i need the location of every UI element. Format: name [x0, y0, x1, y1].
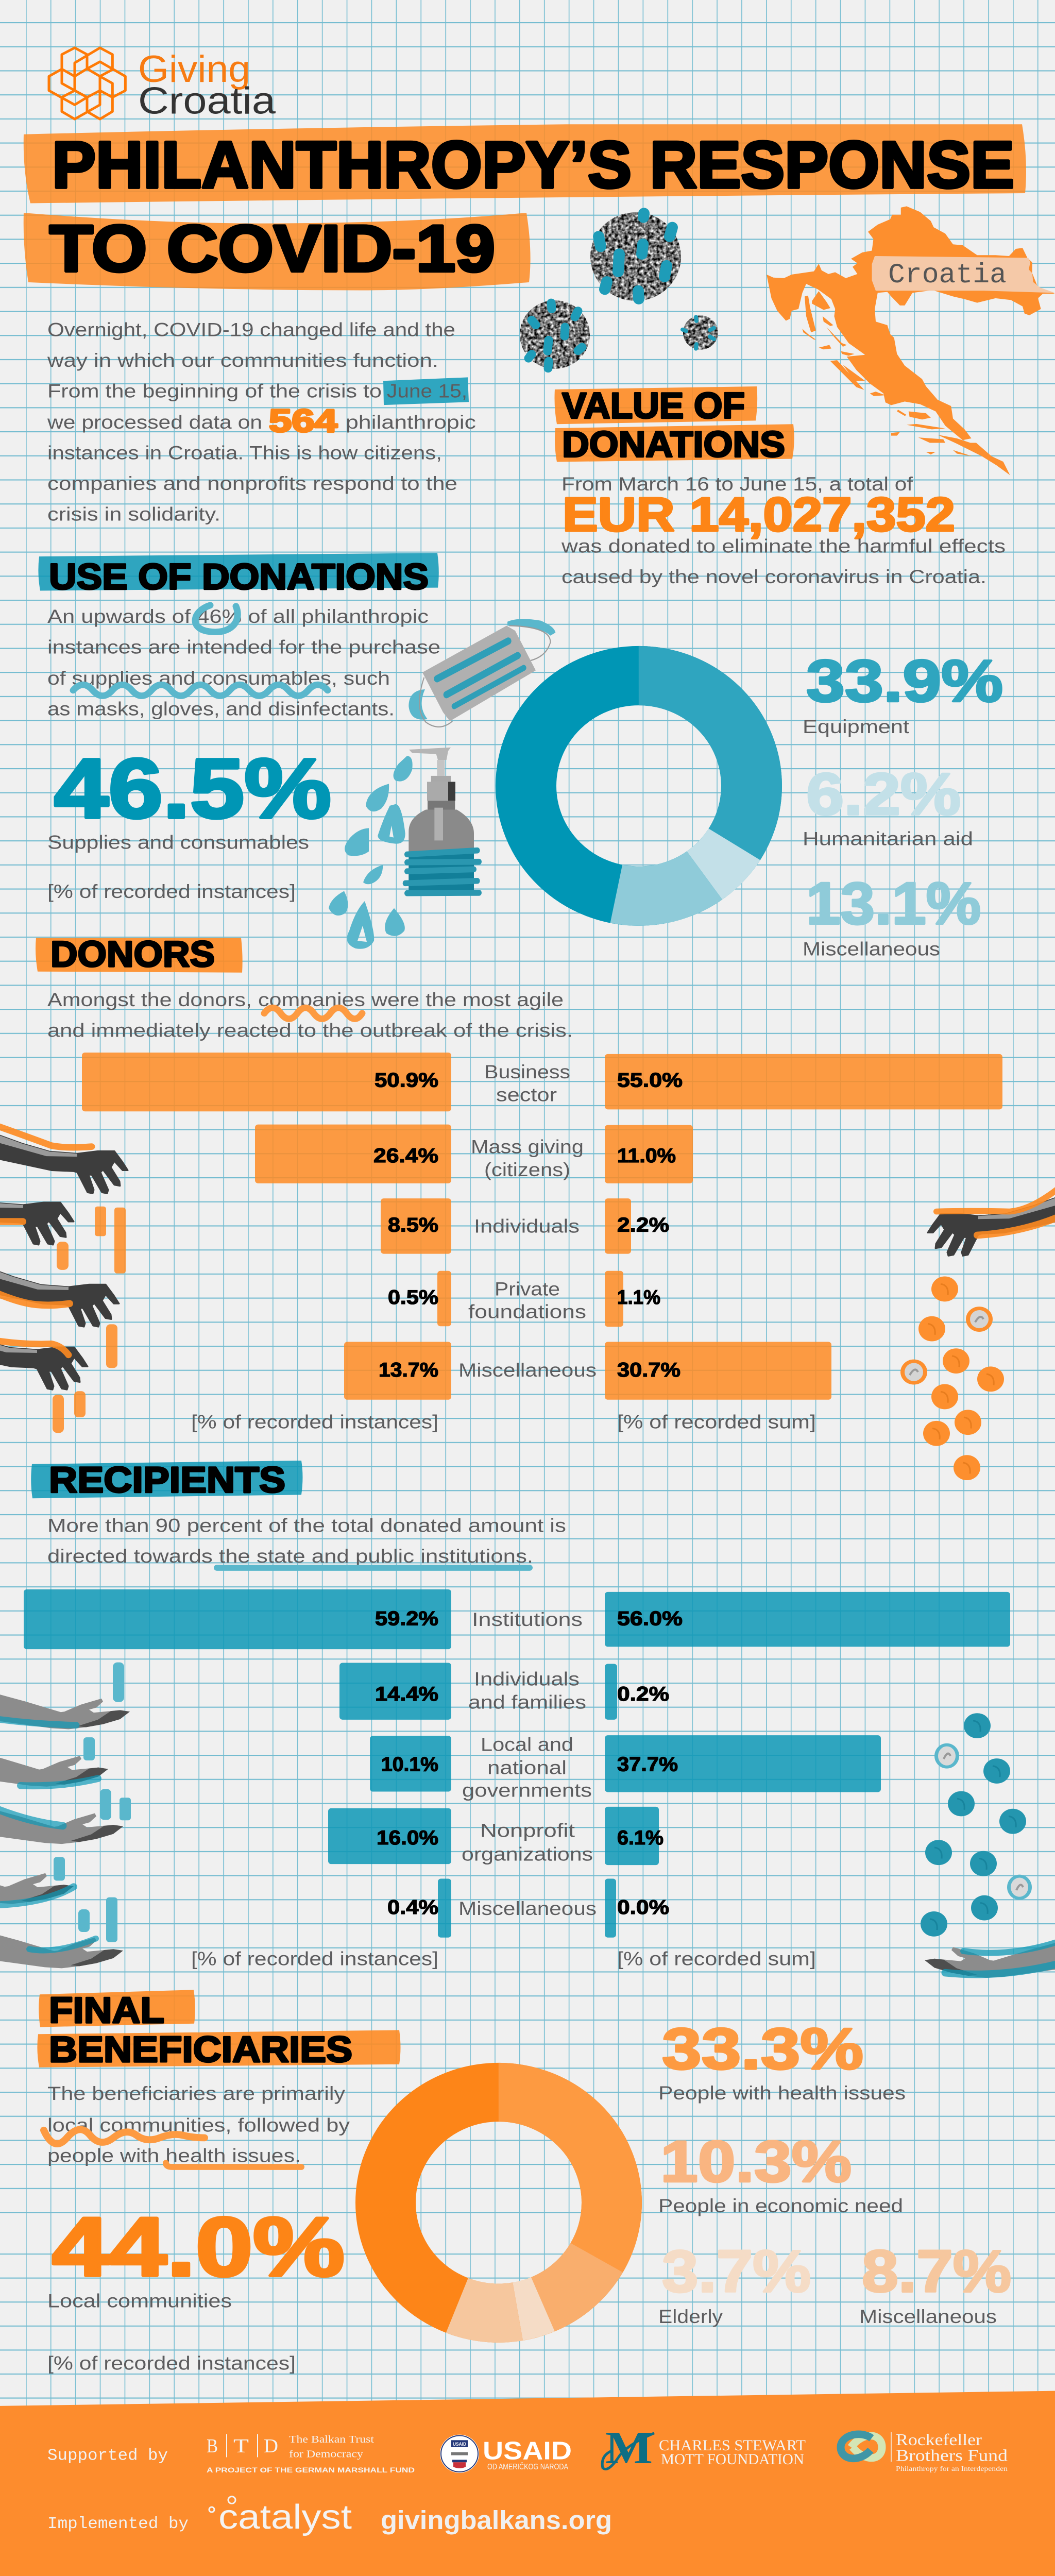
- annotation: teal squiggle: [73, 685, 328, 696]
- stat: people in economic need: [658, 2129, 903, 2216]
- stat: humanitarian aid: 6.2%: [806, 760, 961, 827]
- footer: [0, 2391, 1055, 2576]
- text block: introduction: philanthropic: [346, 411, 476, 433]
- bar values: [375, 1607, 683, 1919]
- stat: elderly: 3.7%: [662, 2238, 811, 2304]
- text block: introduction: 564: [269, 403, 337, 439]
- logo: catalyst: catalyst: [218, 2498, 352, 2536]
- logo: Balkan Trust for Democracy: for Democracy: [289, 2449, 364, 2460]
- title band 2: [24, 213, 531, 290]
- stat: people with health issues: 33.3%: [662, 2016, 863, 2081]
- stat: local communities: 44.0%: [52, 2200, 345, 2294]
- heading: final beneficiaries: BENEFICIARIES: [49, 2030, 352, 2070]
- bar values: 30.7%: [617, 1359, 680, 1381]
- heading: donors: DONORS: [50, 935, 215, 975]
- axis notes: [% of recorded instances]: [191, 1948, 438, 1969]
- stat: equipment: [803, 648, 1003, 737]
- stat: equipment: Equipment: [803, 716, 910, 737]
- bar values: 50.9%: [375, 1069, 438, 1091]
- stat: miscellaneous: [859, 2238, 1011, 2327]
- logo: USAID: [440, 2435, 572, 2473]
- text block: beneficiaries intro: [44, 2083, 350, 2167]
- heading: value of donations: DONATIONS: [562, 425, 785, 465]
- bar values: 55.0%: [617, 1069, 683, 1091]
- logo: USAID: OD AMERIČKOG NARODA: [487, 2462, 568, 2471]
- map label: Croatia: [888, 260, 1007, 291]
- panel: use of donations: [38, 553, 1003, 959]
- bar values: 13.7%: [379, 1359, 438, 1381]
- heading: final beneficiaries: [37, 1990, 400, 2070]
- bar values: 26.4%: [373, 1144, 438, 1167]
- text block with annotations: of supplies and consumables, such: [47, 668, 390, 689]
- heading: final beneficiaries: FINAL: [49, 1991, 164, 2031]
- country shape: [767, 206, 1055, 475]
- stat: equipment: 33.9%: [806, 648, 1003, 714]
- icon: falling orange coins: [900, 1277, 1004, 1480]
- icon: sanitizer drops: [329, 756, 413, 949]
- title line 1: PHILANTHROPY’S RESPONSE: [52, 129, 1014, 202]
- logo: Charles Stewart Mott Foundation: CHARLES STEWART: [659, 2437, 806, 2454]
- logo: Balkan Trust for Democracy: The Balkan Trust: [289, 2434, 374, 2445]
- bar values: 56.0%: [617, 1607, 683, 1630]
- logo: USAID: USAID: [453, 2442, 467, 2447]
- category labels: organizations: [462, 1843, 593, 1865]
- text block: recipients intro: [47, 1515, 566, 1568]
- panel: value of donations: [554, 386, 1006, 587]
- text block: beneficiaries intro: people with health issues.: [47, 2145, 301, 2166]
- stat: local communities: [47, 2200, 345, 2374]
- title band 1: [24, 124, 1026, 204]
- stat: elderly: Elderly: [658, 2306, 723, 2327]
- bar chart: recipients: [24, 1589, 1010, 1969]
- bar values: 6.1%: [617, 1826, 663, 1849]
- heading: value of donations: VALUE OF: [562, 386, 745, 426]
- stat: people with health issues: [658, 2016, 906, 2104]
- text block: introduction: [47, 319, 476, 525]
- heading: recipients: RECIPIENTS: [49, 1460, 285, 1500]
- annotation: circle around 46%: [195, 605, 237, 632]
- logo: Charles Stewart Mott Foundation: M: [605, 2422, 653, 2473]
- icon: falling teal coins: [921, 1713, 1032, 1937]
- title line 2: TO COVID-19: [49, 212, 495, 285]
- text block: beneficiaries intro: The beneficiaries are primarily: [47, 2083, 345, 2104]
- logo: Balkan Trust for Democracy: B: [207, 2435, 218, 2457]
- bar values: 2.2%: [617, 1214, 669, 1236]
- annotation: teal underline: [217, 1565, 530, 1571]
- implemented by label: Implemented by: [47, 2515, 189, 2533]
- stat: elderly: [658, 2238, 811, 2327]
- category labels: Business: [484, 1061, 570, 1082]
- text block with annotations: An upwards of 46% of all philanthropic: [47, 605, 429, 627]
- category labels: sector: [496, 1084, 557, 1106]
- icon: hexagon mark: [49, 48, 125, 119]
- icon: giving hand right: [928, 1170, 1055, 1256]
- icon: coronavirus medium: [520, 300, 590, 369]
- logo: Rockefeller Brothers Fund: Philanthropy for an Interdependen: [896, 2465, 1008, 2472]
- text block: donors intro: Amongst the donors, companies were the most agile: [47, 989, 564, 1010]
- logo: Rockefeller Brothers Fund: Rockefeller: [896, 2431, 982, 2449]
- category labels: Institutions: [472, 1609, 583, 1630]
- icon: face mask: [409, 619, 555, 727]
- category labels: Nonprofit: [480, 1820, 575, 1841]
- logo: Balkan Trust for Democracy: D: [264, 2435, 278, 2457]
- title: [24, 124, 1026, 290]
- stat: supplies and consumables: [% of recorded instances]: [47, 881, 296, 902]
- category labels: [458, 1609, 597, 1919]
- category labels: Miscellaneous: [458, 1359, 597, 1381]
- text block: introduction: we processed data on: [47, 411, 262, 433]
- stat: humanitarian aid: [803, 760, 973, 850]
- icon: giving hands left: [0, 1107, 128, 1433]
- text block: donors intro: [47, 989, 573, 1041]
- category labels: (citizens): [484, 1159, 570, 1180]
- category labels: Miscellaneous: [458, 1897, 597, 1919]
- value text continued: caused by the novel coronavirus in Croatia.: [561, 566, 986, 587]
- bar values: 11.0%: [617, 1144, 676, 1167]
- bar values: 8.5%: [388, 1214, 438, 1236]
- bar values: 59.2%: [375, 1607, 438, 1630]
- logo: USAID: USAID: [483, 2437, 572, 2465]
- stat: supplies and consumables: Supplies and consumables: [47, 832, 309, 853]
- category labels: national: [487, 1757, 567, 1778]
- icon: sanitizer bottle: [405, 748, 479, 893]
- map of Croatia: [767, 206, 1055, 475]
- panel: recipients: [0, 1460, 1055, 1978]
- axis notes: [191, 1948, 816, 1969]
- donut chart: use of donations: [526, 676, 752, 896]
- text block: introduction: From the beginning of the crisis to: [47, 380, 382, 401]
- annotation: orange squiggle: [44, 2129, 205, 2144]
- text block: introduction: companies and nonprofits respond to the: [47, 473, 457, 494]
- category labels: Individuals: [474, 1215, 580, 1236]
- total amount: EUR 14,027,352: [563, 487, 955, 541]
- stat: miscellaneous: Miscellaneous: [859, 2306, 997, 2327]
- value text: From March 16 to June 15, a total of: [561, 473, 913, 495]
- axis notes: [% of recorded sum]: [617, 1948, 816, 1969]
- bar values: 0.4%: [387, 1896, 438, 1919]
- text block: recipients intro: More than 90 percent of the total donated amount is: [47, 1515, 566, 1536]
- bar chart: donors: [82, 1053, 1002, 1432]
- category labels: Private: [495, 1278, 560, 1300]
- category labels: Individuals: [474, 1668, 580, 1689]
- text block: beneficiaries intro: local communities, followed by: [47, 2114, 350, 2136]
- icon: coronavirus small: [683, 315, 718, 350]
- category labels: Mass giving: [471, 1136, 584, 1157]
- stat: local communities: [% of recorded instances]: [47, 2352, 296, 2374]
- donut chart: final beneficiaries: [385, 2092, 612, 2313]
- text block: introduction: Overnight, COVID-19 changed life and the: [47, 319, 455, 340]
- stat: people with health issues: People with health issues: [658, 2082, 906, 2104]
- footer band: [0, 2391, 1055, 2576]
- text block: introduction: crisis in solidarity.: [47, 503, 220, 525]
- category labels: Local and: [481, 1734, 573, 1755]
- category labels: [458, 1061, 597, 1381]
- text block with annotations: as masks, gloves, and disinfectants.: [47, 698, 395, 720]
- axis notes: [% of recorded instances]: [191, 1411, 438, 1432]
- stat: miscellaneous: Miscellaneous: [803, 938, 940, 959]
- stat: supplies and consumables: 46.5%: [54, 742, 331, 836]
- logo: Giving Croatia: [49, 48, 276, 122]
- supported by label: Supported by: [47, 2446, 168, 2465]
- icon: coronavirus large: [590, 212, 681, 301]
- text block: introduction: June 15,: [387, 380, 467, 401]
- stat: people in economic need: 10.3%: [660, 2129, 852, 2194]
- bar values: 0.5%: [388, 1286, 438, 1309]
- logo: Balkan Trust for Democracy: A PROJECT OF THE GERMAN MARSHALL FUND: [207, 2466, 415, 2474]
- bar values: 10.1%: [381, 1753, 438, 1775]
- panel: final beneficiaries: [37, 1990, 1011, 2374]
- stat: miscellaneous: 13.1%: [806, 870, 981, 937]
- bar values: [373, 1069, 683, 1381]
- stat: supplies and consumables: [47, 742, 331, 902]
- axis notes: [191, 1411, 816, 1432]
- stat: people in economic need: People in economic need: [658, 2195, 903, 2216]
- stat: miscellaneous: 8.7%: [862, 2238, 1011, 2304]
- category labels: and families: [468, 1691, 586, 1713]
- heading: use of donations: USE OF DONATIONS: [49, 557, 429, 597]
- text block: introduction: way in which our communities function.: [47, 349, 438, 371]
- heading: value of donations: [554, 386, 794, 465]
- text block: recipients intro: directed towards the state and public institutions.: [47, 1546, 533, 1567]
- text block with annotations: [47, 605, 440, 720]
- logo wordmark: Croatia: [138, 80, 276, 122]
- map label band: [872, 256, 1055, 293]
- bar values: 14.4%: [375, 1683, 438, 1705]
- logo: Charles Stewart Mott Foundation: [602, 2422, 806, 2473]
- bar values: 0.0%: [617, 1896, 669, 1919]
- stat: local communities: Local communities: [47, 2290, 232, 2311]
- text block: introduction: instances in Croatia. This is how citizens,: [47, 442, 442, 464]
- logo: Rockefeller Brothers Fund: Brothers Fund: [896, 2447, 1008, 2464]
- value text continued: was donated to eliminate the harmful effects: [561, 535, 1006, 556]
- stat: humanitarian aid: Humanitarian aid: [803, 828, 973, 850]
- annotation: orange squiggle: [264, 1008, 362, 1019]
- website address: givingbalkans.org: [381, 2505, 612, 2535]
- bar values: 1.1%: [617, 1286, 660, 1309]
- bar values: 0.2%: [617, 1683, 669, 1705]
- text block: donors intro: and immediately reacted to the outbreak of the crisis.: [47, 1020, 573, 1041]
- icon: receiving hands left: [0, 1663, 131, 1968]
- logo wordmark: [138, 48, 276, 122]
- panel: donors: [0, 935, 1055, 1480]
- bar values: 16.0%: [377, 1826, 438, 1849]
- highlight: June 15: [383, 377, 469, 405]
- axis notes: [% of recorded sum]: [617, 1411, 816, 1432]
- logo: Rockefeller Brothers Fund: [841, 2431, 1008, 2472]
- bars: [24, 1589, 1010, 1938]
- logo: Balkan Trust for Democracy: [207, 2434, 415, 2474]
- bar values: 37.7%: [617, 1753, 678, 1775]
- logo: Balkan Trust for Democracy: T: [233, 2435, 249, 2457]
- text block with annotations: instances are intended for the purchase: [47, 636, 440, 657]
- bars: [82, 1053, 1002, 1400]
- logo: Charles Stewart Mott Foundation: MOTT FOUNDATION: [661, 2452, 804, 2468]
- annotation: orange underline: [166, 2163, 301, 2167]
- category labels: governments: [462, 1780, 592, 1801]
- value text continued: [561, 535, 1006, 587]
- logo wordmark: Giving: [138, 48, 250, 90]
- icon: receiving hand right: [925, 1929, 1055, 1978]
- category labels: foundations: [468, 1301, 586, 1322]
